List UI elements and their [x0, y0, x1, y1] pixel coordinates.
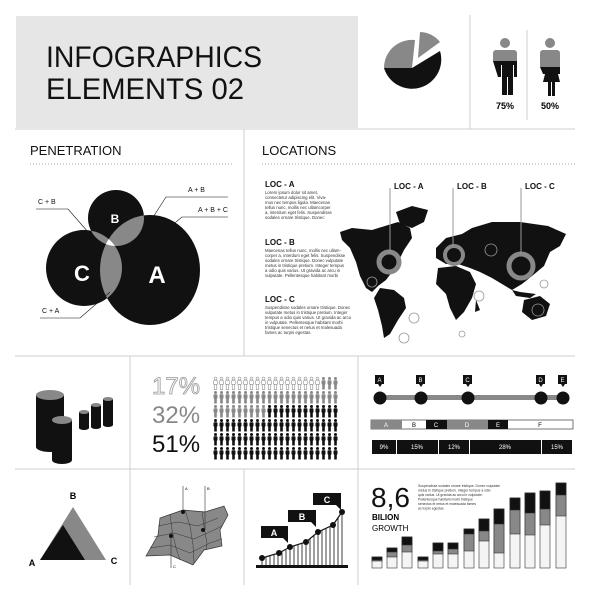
title: ELEMENTS 02	[46, 73, 244, 106]
growth line chart: B	[299, 512, 306, 522]
text block: loc c: in vulputate. Pellentesque habitant morbi	[265, 320, 343, 325]
growth stat: BILION	[372, 513, 399, 522]
triangle chart: C	[111, 556, 118, 566]
triangle chart	[29, 491, 118, 568]
location markers	[367, 188, 548, 343]
growth stat: quis varius. Ut gravida ac arcu in vulputate.	[418, 493, 483, 497]
growth stat: GROWTH	[372, 524, 409, 533]
text block: loc c: fames ac turpis egestas.	[265, 330, 312, 335]
venn labels	[36, 187, 228, 318]
segment bar: B	[412, 423, 416, 429]
venn labels: C + A	[42, 308, 60, 315]
growth line chart: C	[324, 495, 331, 505]
icon: woman 50%: 50%	[541, 101, 559, 111]
growth stat	[371, 482, 500, 533]
segment bar: A	[384, 423, 388, 429]
timeline: B	[418, 378, 423, 384]
text block: loc c: tempus a odio quis varius. Ut gravida ac arcu	[265, 315, 352, 320]
map labels: LOC - A	[394, 182, 424, 191]
icon: man 75%	[493, 38, 517, 111]
map labels: LOC - B	[457, 182, 487, 191]
text block: loc a: a, interdum eget felis. Suspendisse	[265, 210, 332, 215]
timeline: A	[377, 378, 382, 384]
text block: loc b	[265, 238, 346, 278]
icon: woman 50%	[540, 38, 560, 111]
growth line chart: A	[271, 528, 278, 538]
percentages: 51%	[152, 431, 200, 458]
text block: loc a: LOC - A	[265, 180, 295, 189]
heading: locations: LOCATIONS	[262, 143, 336, 158]
segment bar: E	[496, 423, 500, 429]
segment bar	[371, 420, 573, 429]
pie chart icon	[384, 32, 441, 89]
timeline: D	[538, 378, 543, 384]
text block: loc a	[265, 180, 332, 220]
text block: loc b: sodales ornare tristique. Donec vulputate	[265, 258, 344, 263]
text block: loc c: LOC - C	[265, 295, 295, 304]
text block: loc b: metus in tristique pretium. Integer tempus	[265, 263, 344, 268]
icon: cylinders	[36, 390, 113, 464]
percent bar: 15%	[551, 445, 564, 451]
panel: locations	[262, 143, 575, 343]
growth stat: ac turpis egestas.	[418, 506, 445, 510]
text block: loc c: tristique senectus et netus et malesuada	[265, 325, 343, 330]
venn labels: C + B	[38, 199, 56, 206]
growth line chart	[256, 493, 348, 568]
triangle chart: A	[29, 558, 36, 568]
text block: loc b: corper a, interdum eget felis. Suspendisse	[265, 253, 346, 258]
venn diagram: A	[148, 262, 166, 289]
surface chart: B	[207, 486, 210, 491]
text block: loc c: vulputate metus in tristique pretium. Integer	[265, 310, 348, 315]
surface chart: C	[173, 564, 176, 569]
stacked bar chart	[372, 483, 566, 568]
segment bar: C	[434, 423, 439, 429]
timeline: E	[560, 378, 565, 384]
growth stat: metus in tristique pretium. Integer tempus a odio	[418, 488, 491, 492]
text block: loc a: tellus nunc, mollis nec ullamcorper	[265, 205, 331, 210]
map labels	[394, 182, 555, 191]
venn labels: A + B + C	[198, 207, 228, 214]
text block: loc b: vulputate. Pellentesque habitant morbi	[265, 273, 338, 278]
title: INFOGRAPHICS	[46, 41, 262, 74]
percentages	[152, 373, 200, 458]
text block: loc c	[265, 295, 352, 335]
text block: loc a: mus nec tempus ligula. Maecenas	[265, 200, 330, 205]
text block: loc b: Maecenas tellus nunc, mollis nec ullam-	[265, 248, 342, 253]
text block: loc c: Suspendisse sodales ornare tristique. Donec	[265, 305, 351, 310]
surface chart	[146, 486, 228, 569]
map labels: LOC - C	[525, 182, 555, 191]
growth stat: 8,6	[371, 482, 410, 513]
timeline: C	[465, 378, 470, 384]
heading: penetration: PENETRATION	[30, 143, 122, 158]
timeline	[374, 375, 570, 404]
percent bar: 9%	[380, 445, 389, 451]
title	[46, 41, 262, 106]
text block: loc a: Lorem ipsum dolor sit amet,	[265, 190, 318, 195]
text block: loc b: LOC - B	[265, 238, 295, 247]
growth stat: senectus et netus et malesuada fames	[418, 502, 476, 506]
venn labels: A + B	[188, 187, 205, 194]
segment bar: F	[538, 423, 542, 429]
text block: loc a: consectetur adipiscing elit. Viva-	[265, 195, 327, 200]
segment bar: D	[465, 423, 470, 429]
venn diagram: C	[74, 261, 90, 286]
header panel	[16, 16, 358, 128]
panel: penetration	[30, 143, 232, 325]
percent bar: 12%	[448, 445, 461, 451]
text block: loc b: a odio quis varius. Ut gravida ac arcu in	[265, 268, 341, 273]
venn diagram: B	[111, 212, 120, 226]
triangle chart: B	[70, 491, 77, 501]
surface chart: A	[185, 486, 188, 491]
percent bar: 15%	[411, 445, 424, 451]
growth stat: Suspendisse sodales ornare tristique. Donec vulputate	[418, 484, 500, 488]
world map	[340, 206, 566, 338]
percentages: 32%	[152, 402, 200, 429]
growth stat: Pellentesque habitant morbi tristique	[418, 498, 473, 502]
percent bar	[372, 440, 572, 454]
text block: loc a: sodales ornare tristique. Donec	[265, 215, 325, 220]
venn diagram	[46, 190, 200, 325]
percent bar: 28%	[499, 445, 512, 451]
people grid	[214, 377, 338, 460]
percentages: 17%	[152, 373, 200, 400]
icon: man 75%: 75%	[496, 101, 514, 111]
